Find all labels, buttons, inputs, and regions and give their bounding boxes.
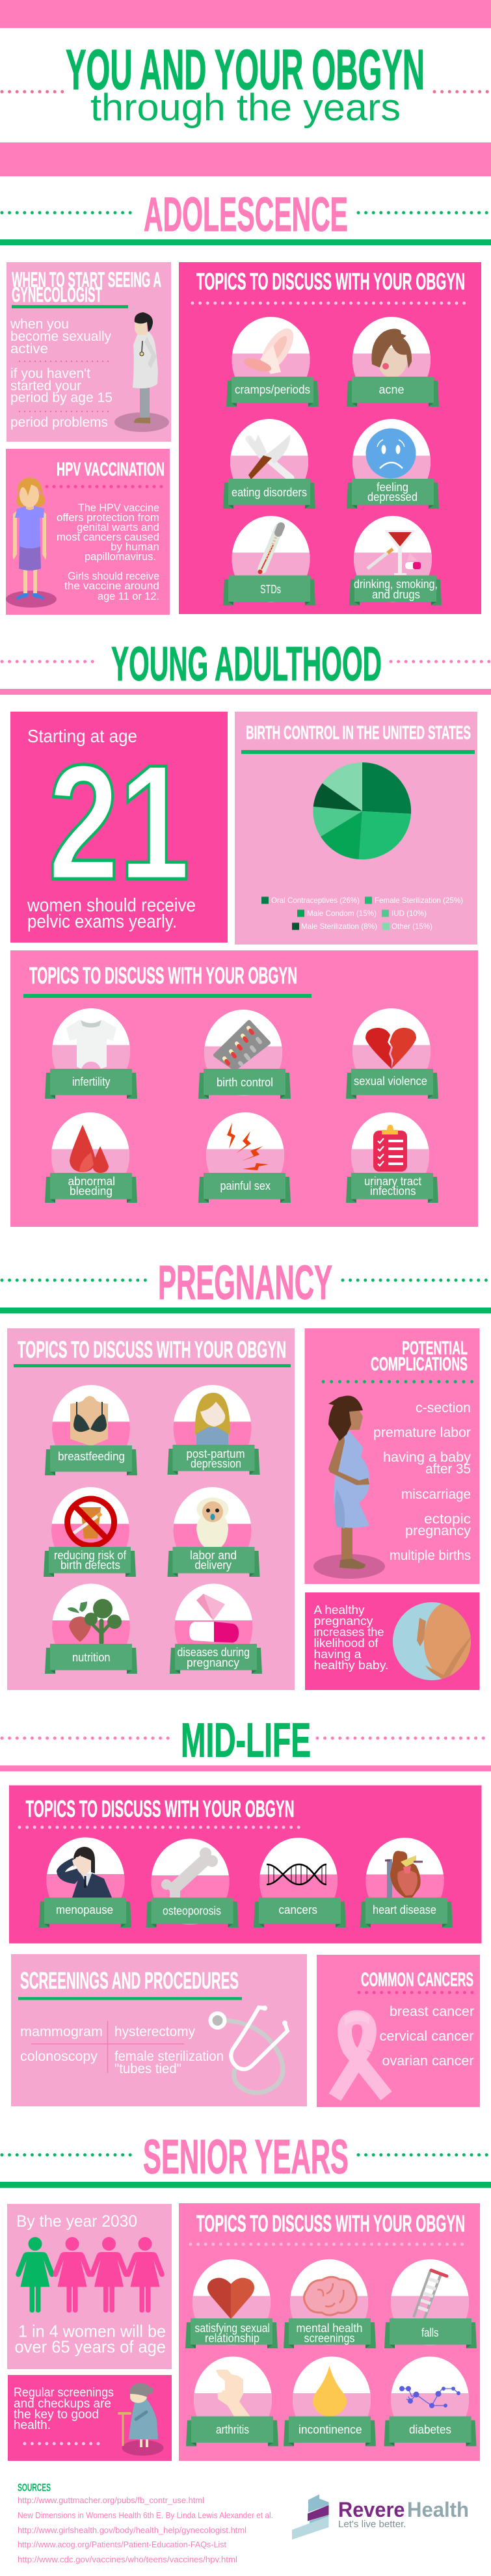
label: nutrition <box>72 1651 111 1664</box>
heading: hpv vaccination: HPV VACCINATION <box>57 459 165 480</box>
icon: woman holding head <box>57 1847 112 1898</box>
legend: IUD (10%) <box>391 909 427 918</box>
panel: regular screenings <box>8 2375 172 2461</box>
icon: breast and bra <box>70 1396 108 1446</box>
heading: when to start <box>12 268 161 308</box>
text: a healthy pregnancy: pregnancy <box>313 1615 373 1628</box>
heading: sources: SOURCES <box>18 2481 51 2494</box>
label: painful sex <box>220 1179 271 1192</box>
section heading: mid-life: MID-LIFE <box>181 1713 311 1767</box>
section heading: adolescence <box>0 187 491 245</box>
text: common cancers list: cervical cancer <box>380 2029 473 2044</box>
label: diabetes <box>409 2423 451 2436</box>
badge: birth control <box>198 1010 291 1099</box>
panel: by the year 2030 <box>7 2204 172 2369</box>
text: complications list: multiple births <box>390 1548 471 1563</box>
label: heart disease <box>373 1903 436 1916</box>
label: post-partum <box>186 1447 245 1460</box>
text: 1 in 4 women <box>14 2321 166 2356</box>
badge: eating disorders <box>223 419 315 509</box>
label: acne <box>378 383 405 396</box>
label: labor and <box>190 1549 237 1562</box>
text: regular screenings: the key to good <box>14 2408 99 2421</box>
big number 21: 21 <box>48 731 190 914</box>
badge: breastfeeding <box>45 1385 137 1475</box>
icon: onesie <box>66 1020 116 1069</box>
heading: when to start: GYNECOLOGIST <box>12 283 102 306</box>
badge: heart disease <box>360 1838 453 1927</box>
text: a healthy pregnancy <box>313 1603 389 1672</box>
badge: cramps/periods <box>226 317 319 407</box>
sources <box>18 2481 273 2564</box>
label: and drugs <box>372 588 420 601</box>
source list: http://www.guttmacher.org/pubs/fb_contr_use.html <box>18 2495 204 2505</box>
text: hpv description: Girls should receive <box>68 570 159 582</box>
icon: thermometer <box>258 526 281 574</box>
text: complications list: c-section <box>416 1401 471 1415</box>
legend: Oral Contraceptives (26%) <box>271 896 360 905</box>
text: 1 in 4 women: 1 in 4 women will be <box>18 2321 166 2341</box>
badge: nutrition <box>45 1583 137 1674</box>
panel: a healthy pregnancy <box>305 1592 480 1690</box>
text: a healthy pregnancy: having a <box>313 1648 362 1661</box>
source list: New Dimensions in Womens Health 6th E. By Linda Lewis Alexander et al. <box>18 2510 273 2520</box>
badge: cancers <box>254 1838 346 1927</box>
text: a healthy pregnancy: healthy baby. <box>313 1659 389 1672</box>
heading: when to start: WHEN TO START SEEING A <box>12 268 161 291</box>
wordmark: Let's live better. <box>338 2519 406 2530</box>
logo: revere health <box>292 2494 469 2540</box>
icon: blood drops <box>70 1125 109 1173</box>
label: cancers <box>278 1903 317 1916</box>
label: arthritis <box>216 2423 249 2436</box>
text: complications list: pregnancy <box>405 1523 471 1538</box>
text: procedures table: colonoscopy <box>20 2049 98 2064</box>
text: when to start list: become sexually <box>10 329 111 344</box>
text: 1 in 4 women: over 65 years of age <box>14 2337 166 2356</box>
wordmark: Health <box>407 2498 469 2521</box>
text: women should receive pelvic exams yearly: pelvic exams yearly. <box>27 911 177 932</box>
badge: satisfying sexual relationship <box>185 2259 278 2348</box>
icon: clipboard <box>373 1125 407 1172</box>
text: procedures table <box>20 2021 224 2076</box>
label: pregnancy <box>187 1656 239 1669</box>
icon: molecules <box>399 2386 460 2408</box>
icon: pregnant woman <box>313 1395 385 1579</box>
panel: common cancers <box>317 1955 480 2107</box>
text: when to start list: period problems <box>10 415 108 430</box>
panel: potential complications <box>304 1328 480 1584</box>
icon: broken heart <box>365 1028 416 1069</box>
label: urinary tract <box>364 1175 421 1188</box>
icon: doctor <box>114 312 169 432</box>
label: STDs <box>260 583 281 596</box>
icon: hand <box>216 2370 250 2417</box>
text: hpv description: the vaccine around <box>64 580 159 592</box>
text: when to start list: when you <box>10 317 69 332</box>
label: satisfying sexual <box>195 2322 270 2335</box>
text: hpv description: age 11 or 12. <box>98 590 159 602</box>
text: common cancers list <box>380 2004 474 2069</box>
pie chart <box>313 762 411 859</box>
panel: adolescence topics <box>179 262 481 614</box>
label <box>364 1175 421 1198</box>
label <box>177 1646 250 1669</box>
text: hpv description: papillomavirus. <box>85 550 156 563</box>
panel: birth control in the united states <box>235 712 477 945</box>
badge: labor and delivery <box>168 1487 260 1577</box>
pictogram: 1 in 4 women <box>16 2237 165 2313</box>
wordmark <box>338 2498 469 2530</box>
badge: falls <box>384 2259 477 2348</box>
icon: pad <box>243 323 300 377</box>
label: infertility <box>72 1075 111 1088</box>
panel: hpv vaccination <box>6 449 170 615</box>
icon: brain <box>304 2277 356 2315</box>
label: sexual violence <box>354 1075 427 1088</box>
text: hpv description <box>57 502 159 602</box>
icon: drop <box>313 2366 347 2417</box>
source list: http://www.cdc.gov/vaccines/who/teens/vaccines/hpv.html <box>18 2555 237 2564</box>
icon: heart <box>207 2278 254 2319</box>
label: delivery <box>195 1559 232 1572</box>
badge: reducing risk of birth defects <box>44 1487 136 1577</box>
second pink band <box>0 142 491 176</box>
icon: anatomical heart <box>385 1851 423 1898</box>
label: feeling <box>377 481 408 494</box>
text: when to start list: started your <box>10 379 81 394</box>
title <box>2 38 489 129</box>
label <box>354 578 438 601</box>
label: infections <box>370 1185 416 1198</box>
badge: infertility <box>45 1008 137 1099</box>
text: procedures table: hysterectomy <box>114 2024 195 2039</box>
text: complications list: miscarriage <box>401 1487 471 1502</box>
text: hpv description: offers protection from <box>57 511 159 524</box>
icon: drink, cigarette, pill <box>367 530 421 575</box>
label: relationship <box>205 2331 259 2344</box>
icon: pregnant belly <box>393 1602 475 1682</box>
label <box>186 1447 245 1470</box>
icon: bone <box>161 1847 218 1898</box>
heading: screenings and procedures: SCREENINGS AND PROCEDURES <box>20 1967 239 1994</box>
text: procedures table: "tubes tied" <box>114 2061 181 2076</box>
title: through the years <box>90 87 401 129</box>
heading: topics: TOPICS TO DISCUSS WITH YOUR OBGYN <box>26 1795 295 1822</box>
text: women should receive pelvic exams yearly <box>27 895 196 932</box>
text: hpv description: genital warts and <box>77 521 159 533</box>
wordmark: Revere <box>338 2498 405 2521</box>
panel: pregnancy topics <box>7 1328 295 1690</box>
panel: young adulthood topics <box>10 950 478 1227</box>
text: complications list: ectopic <box>424 1512 471 1527</box>
badge: mental health screenings <box>284 2259 376 2348</box>
source list <box>18 2495 273 2564</box>
text: complications list: after 35 <box>425 1462 471 1477</box>
text: women should receive pelvic exams yearly: women should receive <box>27 895 196 916</box>
label: breastfeeding <box>58 1450 125 1463</box>
label <box>367 481 418 503</box>
text: regular screenings: and checkups are <box>14 2397 111 2411</box>
text: when to start list: period by age 15 <box>10 390 113 405</box>
badge: urinary tract infections <box>346 1112 438 1203</box>
badge: incontinence <box>284 2356 376 2446</box>
icon: no smoking or drinking sign <box>68 1499 114 1546</box>
text: by the year 2030: By the year 2030 <box>16 2212 137 2231</box>
icon: swaddled baby <box>196 1497 229 1547</box>
icon: dna <box>267 1864 326 1885</box>
label: depressed <box>367 490 418 503</box>
legend: Other (15%) <box>391 922 432 931</box>
text: procedures table: female sterilization <box>114 2049 224 2064</box>
label: abnormal <box>68 1175 115 1188</box>
icon: logo ribbon <box>292 2494 329 2540</box>
icon: elderly woman <box>119 2383 164 2456</box>
label <box>54 1549 127 1572</box>
legend: Female Sterilization (25%) <box>375 896 463 905</box>
panel: when to start seeing a gynecologist <box>7 262 171 442</box>
label: falls <box>421 2326 438 2339</box>
icon: awareness ribbon <box>335 2012 386 2097</box>
icon: capsule <box>189 1594 239 1643</box>
badge: osteoporosis <box>146 1838 238 1927</box>
badge: arthritis <box>186 2356 278 2446</box>
heading: topics <box>14 1336 291 1367</box>
label: osteoporosis <box>163 1905 221 1918</box>
icon: pill pack <box>215 1022 269 1069</box>
badge: drinking, smoking, and drugs <box>349 516 442 605</box>
legend <box>261 896 463 931</box>
text: regular screenings: health. <box>14 2419 51 2432</box>
text: complications list: premature labor <box>373 1425 471 1440</box>
text: starting at age: Starting at age <box>27 726 137 746</box>
text: when to start list: active <box>10 342 48 356</box>
label: screenings <box>304 2331 355 2344</box>
icon: girl <box>6 477 57 608</box>
label: depression <box>191 1457 241 1470</box>
source list: http://www.acog.org/Patients/Patient-Education-FAQs-List <box>18 2540 226 2549</box>
text: when to start list: if you haven't <box>10 366 90 381</box>
panel: mid-life topics <box>9 1785 481 1944</box>
text: common cancers list: breast cancer <box>390 2004 474 2019</box>
legend: Male Condom (15%) <box>307 909 377 918</box>
label: drinking, smoking, <box>354 578 438 591</box>
icon: sad face <box>365 428 416 479</box>
section heading: mid-life <box>0 1713 491 1771</box>
label <box>68 1175 115 1198</box>
text: when to start list <box>10 317 113 430</box>
text: procedures table: mammogram <box>20 2024 103 2039</box>
label: cramps/periods <box>235 383 310 396</box>
label: birth defects <box>60 1559 120 1572</box>
section heading: pregnancy <box>0 1255 491 1313</box>
label: mental health <box>297 2322 363 2335</box>
text: a healthy pregnancy: A healthy <box>313 1603 364 1617</box>
section heading: pregnancy: PREGNANCY <box>158 1255 332 1309</box>
label: bleeding <box>70 1185 113 1198</box>
icon: woman with blond hair <box>195 1393 230 1445</box>
label: diseases during <box>177 1646 250 1659</box>
label: reducing risk of <box>54 1549 127 1562</box>
badge: post-partum depression <box>168 1385 260 1475</box>
heading: potential complications <box>371 1338 468 1375</box>
label <box>190 1549 237 1572</box>
badge: painful sex <box>198 1112 291 1203</box>
badge: diseases during pregnancy <box>170 1583 262 1674</box>
text: complications list <box>373 1401 471 1563</box>
badge: acne <box>347 317 439 407</box>
label <box>297 2322 363 2344</box>
heading: topics: TOPICS TO DISCUSS WITH YOUR OBGYN <box>29 962 297 989</box>
badge: abnormal bleeding <box>45 1112 137 1203</box>
label <box>195 2322 270 2344</box>
section heading: senior years <box>0 2130 491 2188</box>
panel: senior topics <box>179 2203 480 2461</box>
heading: topics: TOPICS TO DISCUSS WITH YOUR OBGYN <box>18 1336 286 1363</box>
icon: stethoscope <box>211 2006 287 2093</box>
badge: menopause <box>39 1837 131 1927</box>
badge: STDs <box>223 516 315 605</box>
text: complications list: having a baby <box>383 1450 471 1465</box>
text: regular screenings <box>14 2386 114 2432</box>
top pink band <box>0 0 491 28</box>
text: common cancers list: ovarian cancer <box>382 2054 473 2069</box>
icon: beet and broccoli <box>68 1599 122 1643</box>
badge: diabetes <box>384 2356 476 2446</box>
source list: http://www.girlshealth.gov/body/health_help/gynecologist.html <box>18 2525 246 2535</box>
heading: screenings and procedures <box>18 1967 242 2000</box>
panel: screenings and procedures <box>11 1954 307 2106</box>
text: hpv description: The HPV vaccine <box>78 502 159 514</box>
text: a healthy pregnancy: increases the <box>313 1626 384 1639</box>
icon: knife and fork <box>248 435 291 479</box>
label: menopause <box>56 1903 113 1916</box>
text: hpv description: most cancers caused <box>57 531 159 543</box>
text: a healthy pregnancy: likelihood of <box>313 1637 379 1650</box>
heading: topics <box>23 962 312 998</box>
label: eating disorders <box>232 486 307 499</box>
legend: Male Sterilization (8%) <box>301 922 377 931</box>
panel: starting at age 21 <box>10 712 228 943</box>
text: regular screenings: Regular screenings <box>14 2386 114 2400</box>
badge: sexual violence <box>346 1008 438 1099</box>
label: incontinence <box>299 2423 362 2436</box>
badge: feeling depressed <box>347 419 439 509</box>
label: birth control <box>217 1076 273 1089</box>
icon: ladder <box>414 2270 447 2320</box>
heading: birth control <box>241 723 475 754</box>
icon: acne face <box>371 329 412 377</box>
text: hpv description: by human <box>111 541 159 553</box>
icon: lightning bolts <box>227 1123 269 1170</box>
